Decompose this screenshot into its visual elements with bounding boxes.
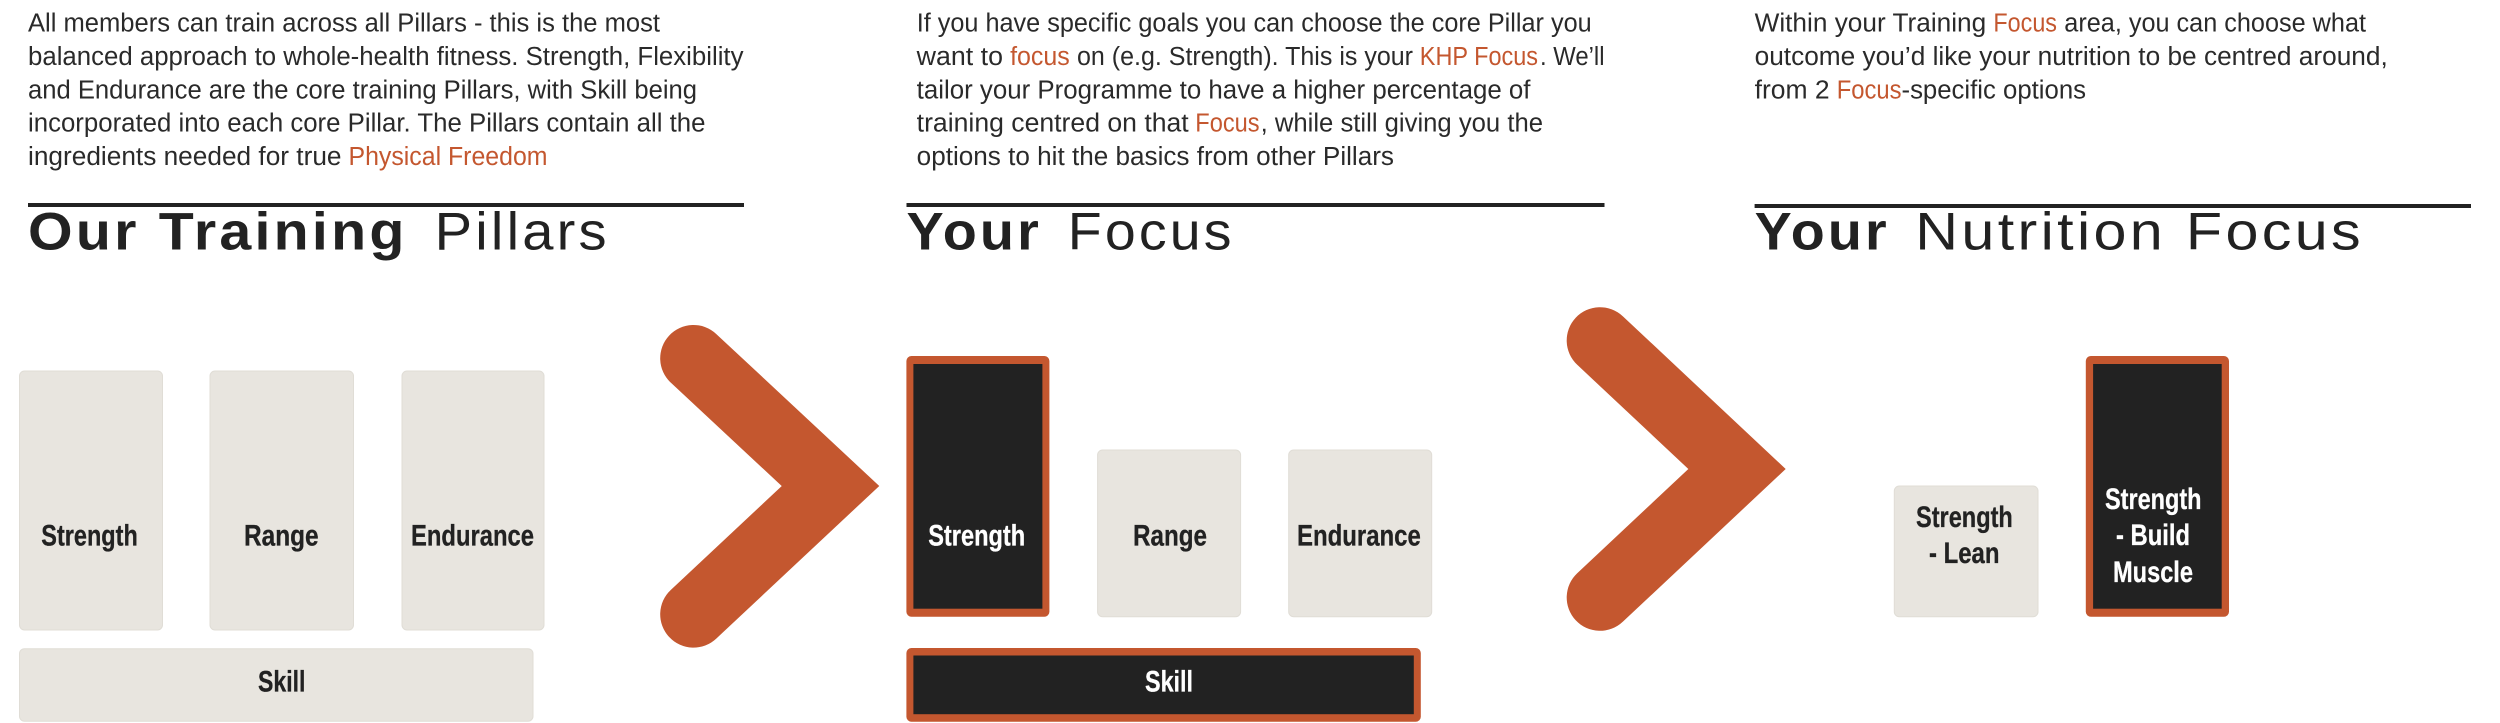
- heading: your nutrition focus: [1755, 202, 2364, 261]
- heading: our training pillars: Pillars: [435, 202, 610, 261]
- text block: pillars intro: [28, 10, 744, 171]
- heading: our training pillars: Our Training: [28, 202, 408, 261]
- heading: your nutrition focus: Your: [1755, 202, 1890, 261]
- card: strength build muscle selected: [2086, 356, 2229, 617]
- text block: focus intro: training centred on that: [917, 110, 1189, 138]
- text block: pillars intro: balanced approach to whole-health fitness. Strength, Flexibility: [28, 43, 744, 71]
- text block: nutrition intro: Focus: [1993, 10, 2057, 38]
- text block: focus intro: Focus: [1195, 110, 1260, 138]
- card: strength build muscle selected: - Build: [2116, 519, 2190, 552]
- text block: focus intro: If you have specific goals you can choose the core Pillar you: [917, 10, 1592, 38]
- text block: nutrition intro: area, you can choose what: [2064, 10, 2366, 38]
- card: skill selected: Skill: [1145, 666, 1193, 699]
- card: skill: [20, 649, 533, 721]
- text block: pillars intro: ingredients needed for true: [28, 143, 342, 171]
- card: skill: Skill: [258, 666, 305, 699]
- text block: nutrition intro: Within your Training: [1755, 10, 1986, 38]
- text block: nutrition intro: -specific options: [1902, 76, 2086, 104]
- card: strength: Strength: [41, 520, 138, 553]
- card: endurance: [402, 371, 544, 630]
- card: strength selected: Strength: [928, 520, 1025, 553]
- card: endurance: Endurance: [411, 520, 534, 553]
- text block: nutrition intro: Focus: [1837, 76, 1902, 104]
- card: strength build muscle selected: Strength: [2105, 483, 2202, 516]
- panel: your focus: [906, 10, 1604, 722]
- heading: your nutrition focus: Nutrition Focus: [1915, 202, 2364, 261]
- text block: focus intro: want to: [916, 43, 1003, 71]
- heading: our training pillars: [28, 202, 610, 261]
- text block: focus intro: focus: [1010, 43, 1070, 71]
- text block: focus intro: KHP Focus: [1420, 43, 1538, 71]
- panel: your nutrition focus: [1755, 10, 2471, 617]
- text block: pillars intro: All members can train across all Pillars - this is the most: [28, 10, 660, 38]
- text block: pillars intro: and Endurance are the core training Pillars, with Skill being: [28, 76, 697, 104]
- text block: focus intro: [916, 10, 1604, 171]
- text block: focus intro: , while still giving you the: [1261, 110, 1543, 138]
- card: strength lean: Strength: [1916, 501, 2013, 534]
- text block: focus intro: tailor your Programme to have a higher percentage of: [917, 76, 1531, 104]
- card: strength build muscle selected: Muscle: [2113, 556, 2193, 589]
- card: range: Range: [1133, 520, 1207, 553]
- panel: our training pillars: [20, 10, 744, 721]
- arrow: chevron one: [694, 358, 830, 614]
- text block: pillars intro: Physical Freedom: [348, 143, 548, 171]
- card: range: Range: [244, 520, 319, 553]
- text block: nutrition intro: [1755, 10, 2388, 104]
- card: range: [1098, 450, 1241, 617]
- text block: nutrition intro: outcome you’d like your nutrition to be centred around,: [1755, 43, 2388, 71]
- card: strength lean: [1894, 486, 2038, 617]
- card: strength lean: - Lean: [1929, 537, 2000, 570]
- text block: focus intro: options to hit the basics from other Pillars: [917, 143, 1394, 171]
- heading: your focus: Focus: [1068, 202, 1235, 261]
- arrow: chevron two: [1600, 340, 1737, 598]
- card: skill selected: [906, 648, 1421, 722]
- text block: focus intro: . We’ll: [1540, 43, 1604, 71]
- text block: pillars intro: incorporated into each core Pillar. The Pillars contain all the: [28, 110, 706, 138]
- card: endurance: [1289, 450, 1432, 617]
- card: endurance: Endurance: [1297, 520, 1421, 553]
- card: strength selected: [906, 356, 1049, 617]
- text block: nutrition intro: from 2: [1755, 76, 1830, 104]
- card: range: [210, 371, 354, 630]
- heading: your focus: [906, 202, 1235, 261]
- card: strength: [20, 371, 162, 630]
- heading: your focus: Your: [906, 202, 1042, 261]
- text block: focus intro: on (e.g. Strength). This is your: [1077, 43, 1413, 71]
